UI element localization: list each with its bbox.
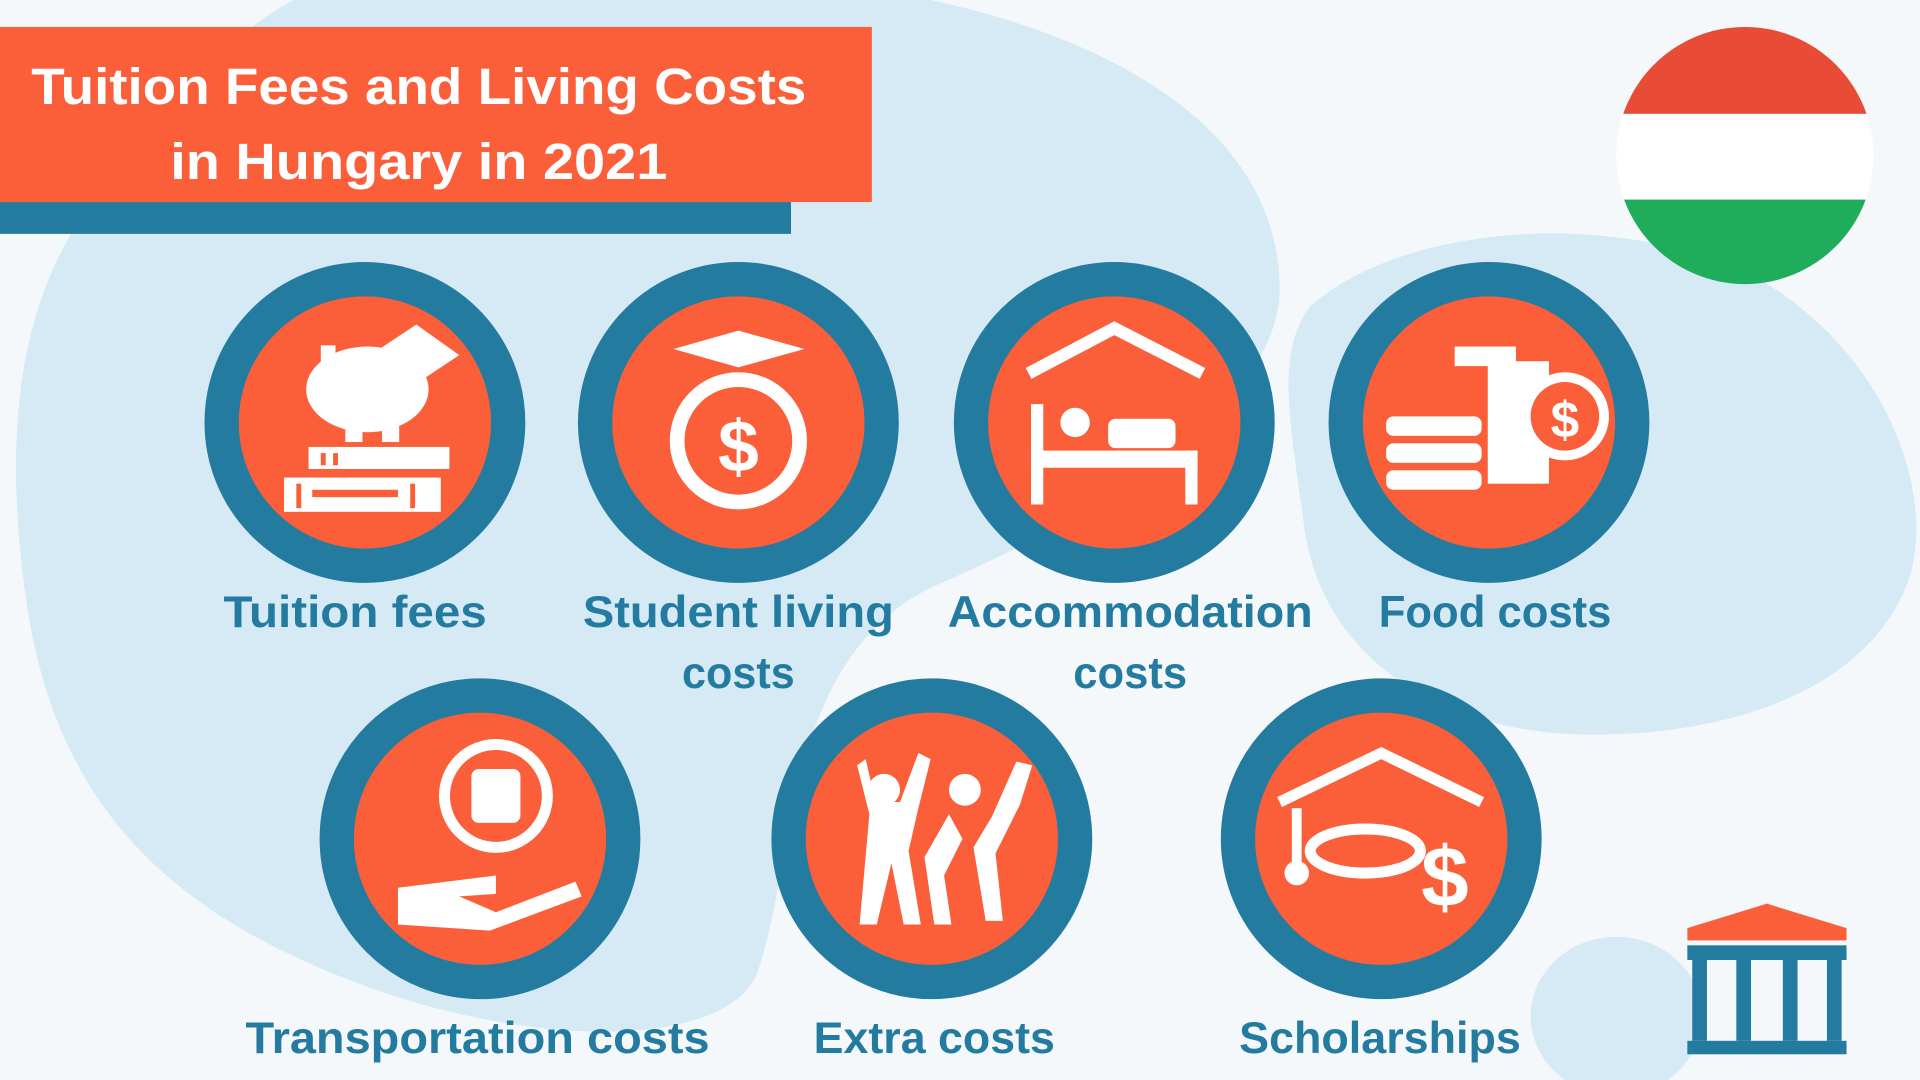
item: scholarships	[1238, 696, 1524, 1063]
item: tuition fees: Tuition fees	[223, 588, 487, 637]
icon: Hungarian flag	[1616, 27, 1874, 284]
item: accommodation costs	[948, 279, 1313, 698]
item: student living costs: costs	[682, 649, 795, 698]
item: food costs: $	[1551, 390, 1579, 448]
item: student living costs: $	[718, 404, 759, 487]
item: accommodation costs: costs	[1073, 649, 1187, 698]
title banner: in Hungary in 2021	[170, 132, 667, 190]
title banner: Tuition Fees and Living Costs	[31, 57, 806, 115]
item: scholarships: Scholarships	[1239, 1014, 1521, 1063]
item: extra costs	[789, 696, 1075, 1063]
item: food costs: Food costs	[1379, 588, 1611, 637]
item: transportation costs: Transportation costs	[246, 1014, 710, 1063]
title banner	[0, 27, 872, 234]
item: student living costs: Student living	[583, 588, 894, 637]
item: food costs	[1346, 279, 1632, 637]
item: extra costs: Extra costs	[814, 1014, 1055, 1063]
item: accommodation costs: Accommodation	[948, 588, 1313, 637]
icon: university building logo	[1687, 904, 1847, 1054]
item: scholarships: $	[1421, 829, 1469, 925]
item: transportation costs	[246, 696, 710, 1063]
item: student living costs	[583, 279, 894, 698]
item: tuition fees	[222, 279, 508, 637]
